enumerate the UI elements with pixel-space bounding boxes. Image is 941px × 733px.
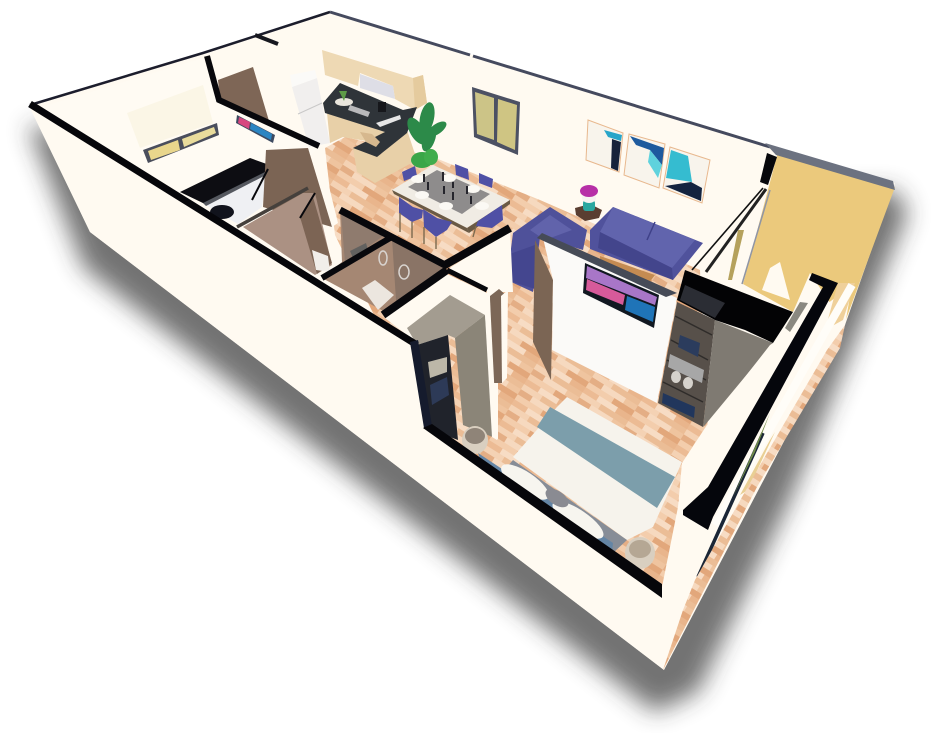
- brown door panels: [263, 146, 338, 227]
- bathroom two: [322, 210, 445, 312]
- right wall: [662, 273, 855, 670]
- kitchen base cabinets: [327, 113, 417, 183]
- television: [583, 263, 659, 328]
- left room laundry unit: [180, 158, 275, 224]
- headboard: [478, 453, 613, 553]
- yellow bedroom back wall: [743, 152, 895, 322]
- dining chairs back row: [402, 164, 493, 188]
- wood floor: [325, 137, 708, 590]
- drop shadow: [28, 125, 908, 712]
- grey wall top: [785, 302, 808, 332]
- fridge: [290, 70, 330, 147]
- central wall window: [472, 87, 520, 155]
- wall-mounted display in left room: [236, 115, 275, 143]
- back wall top edge: [30, 12, 895, 190]
- left room door: [218, 67, 269, 121]
- range hood: [360, 74, 395, 99]
- dining table: [392, 165, 510, 233]
- bedside lamps: [462, 426, 655, 569]
- bedroom bookcase: [658, 270, 793, 427]
- wall art triptych: [586, 120, 710, 203]
- sofa left: [507, 207, 587, 292]
- outer green picture: [733, 413, 770, 497]
- bedroom front wall cap: [423, 424, 662, 598]
- front wall faces: [30, 104, 664, 670]
- kitchen countertop: [323, 83, 417, 157]
- window blind: [127, 85, 213, 148]
- closet by entry: [407, 295, 497, 440]
- outer picture edge: [698, 433, 763, 577]
- sofa right: [590, 207, 703, 280]
- main partition walls: [207, 56, 510, 315]
- left room window: [143, 123, 219, 163]
- blanket: [537, 407, 675, 508]
- kitchen upper cabinets: [322, 50, 427, 110]
- outer wood strip: [663, 325, 845, 670]
- inner wall behind closet: [385, 274, 488, 345]
- central white wall and door frame: [447, 228, 513, 440]
- coffee table: [600, 256, 655, 288]
- wardrobe door: [703, 320, 773, 427]
- black wall cap: [683, 273, 838, 530]
- closet-side dark wall: [410, 340, 432, 428]
- potted plant: [403, 101, 449, 168]
- bathroom one: [237, 188, 332, 275]
- bed: [478, 397, 682, 553]
- front wall black cap: [30, 104, 417, 345]
- left room back wall: [38, 58, 318, 208]
- side table with orchid: [575, 185, 602, 221]
- door to bedroom: [533, 240, 553, 380]
- wall stub: [255, 35, 278, 44]
- dining chairs front row: [399, 197, 503, 249]
- beige end panel: [825, 283, 855, 330]
- black post and diagonal door lines: [692, 153, 790, 300]
- wardrobe top: [677, 270, 793, 343]
- television wall: [537, 233, 677, 403]
